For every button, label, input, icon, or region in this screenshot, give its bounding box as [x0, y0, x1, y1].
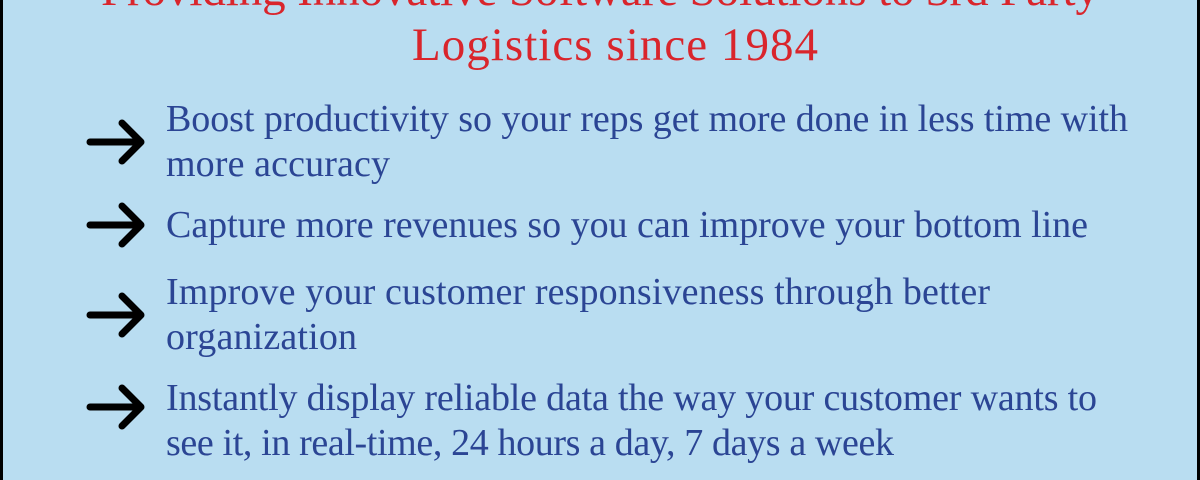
benefit: real-time data: Instantly display reliable data the way your customer wants to: [166, 377, 1097, 419]
title: [101, 0, 1100, 71]
benefit: revenues: Capture more revenues so you can improve your bottom line: [166, 204, 1088, 246]
benefit: productivity: Boost productivity so your reps get more done in less time with: [166, 98, 1128, 140]
icon: arrow 2: [90, 206, 141, 244]
benefit: responsiveness: organization: [166, 316, 357, 358]
benefit: responsiveness: [166, 271, 990, 358]
benefit: productivity: [166, 98, 1128, 185]
benefit: real-time data: [166, 377, 1097, 464]
benefit: productivity: more accuracy: [166, 143, 390, 185]
benefit: real-time data: see it, in real-time, 24 hours a day, 7 days a week: [166, 422, 894, 464]
icon: arrow 1: [90, 123, 141, 161]
benefit: responsiveness: Improve your customer responsiveness through better: [166, 271, 990, 313]
title: Logistics since 1984: [412, 19, 818, 71]
icon: arrow 4: [90, 388, 141, 426]
icon: arrow 3: [90, 296, 141, 334]
